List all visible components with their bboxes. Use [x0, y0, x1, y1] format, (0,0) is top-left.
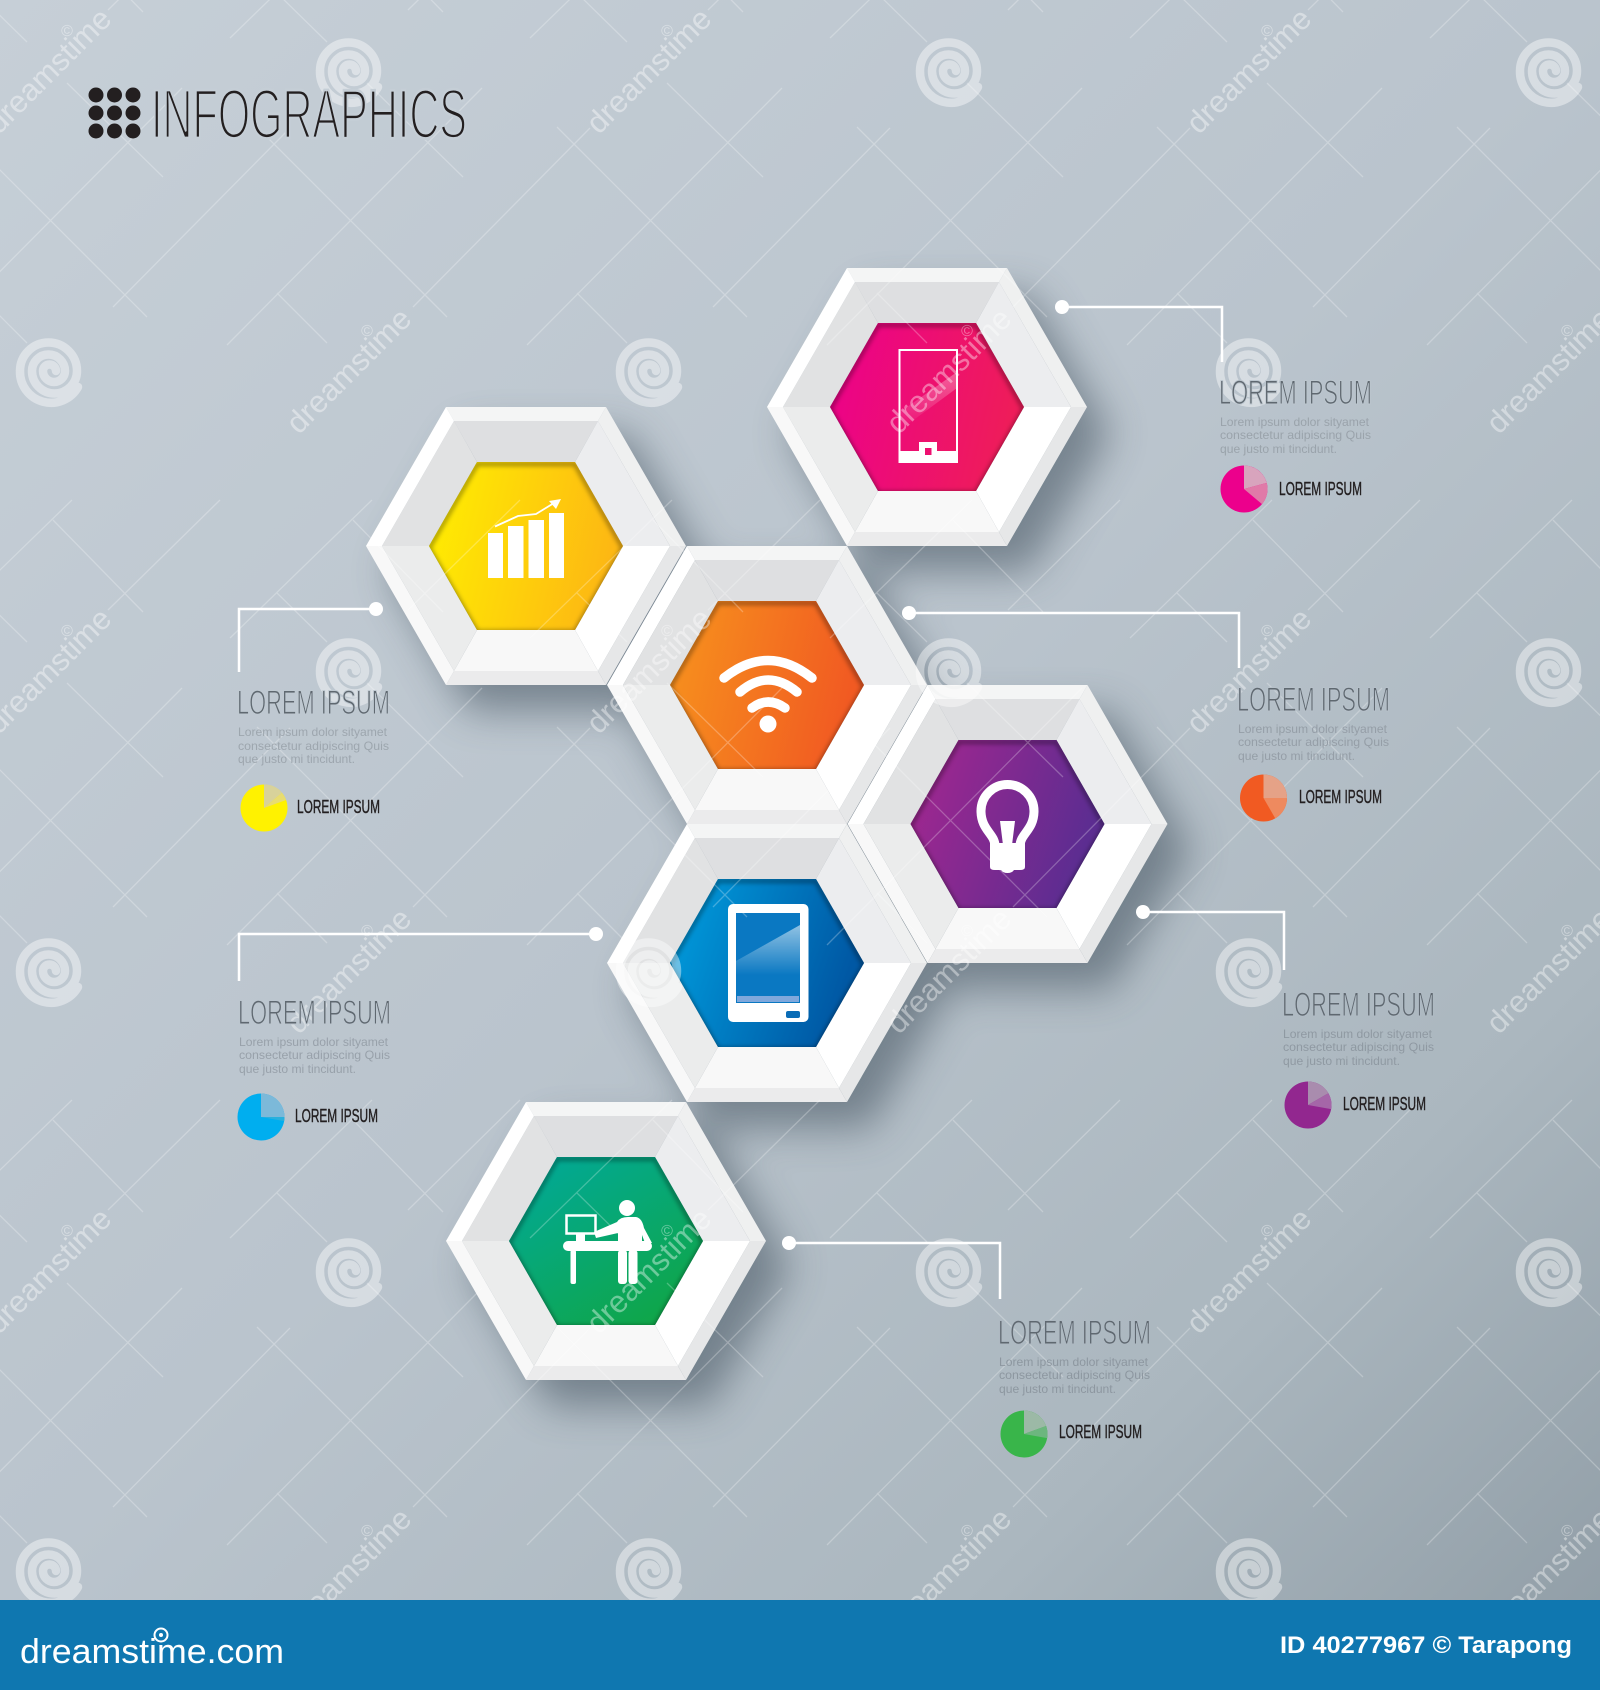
- callout: purple: [1136, 905, 1435, 1128]
- callout: yellow: LOREM IPSUM: [237, 684, 390, 722]
- watermark: dreamstime text: ©: [1561, 1523, 1573, 1540]
- hexagon: green workstation: [446, 1102, 766, 1380]
- watermark: dreamstime text: ©: [661, 23, 673, 40]
- title icon: dot grid: [88, 88, 140, 138]
- watermark: dreamstime text: ©: [361, 1523, 373, 1540]
- callout: blue: LOREM IPSUM: [238, 994, 391, 1032]
- callout: yellow: LOREM IPSUM: [297, 797, 380, 817]
- watermark: dreamstime text: ©: [1561, 323, 1573, 340]
- watermark: dreamstime text: dreamstime: [279, 301, 418, 440]
- callout: pink: que justo mi tincidunt.: [1220, 442, 1337, 456]
- footer bar: [0, 1600, 1600, 1690]
- watermark: dreamstime text: dreamstime: [579, 1, 718, 140]
- callout: purple: que justo mi tincidunt.: [1283, 1054, 1400, 1068]
- hexagon: purple bulb: [848, 685, 1168, 963]
- watermark: dreamstime text: ©: [661, 623, 673, 640]
- watermark: dreamstime text: dreamstime: [879, 901, 1018, 1040]
- callout: purple: consectetur adipiscing Quis: [1283, 1040, 1434, 1054]
- callout: blue: consectetur adipiscing Quis: [239, 1048, 390, 1062]
- callout: yellow: consectetur adipiscing Quis: [238, 739, 389, 753]
- callout: pink: [1055, 300, 1372, 512]
- watermark: dreamstime text: ©: [661, 1223, 673, 1240]
- hexagon: yellow chart: [366, 407, 686, 685]
- watermark: dreamstime text: dreamstime: [879, 1501, 1018, 1640]
- watermark: dreamstime text: ©: [1261, 623, 1273, 640]
- hexagon: blue tablet: [607, 824, 927, 1102]
- callout: pink: consectetur adipiscing Quis: [1220, 428, 1371, 442]
- callout: pink: LOREM IPSUM: [1279, 479, 1362, 499]
- hexagon: orange wifi: [607, 546, 927, 824]
- watermark: dreamstime text: ©: [1261, 23, 1273, 40]
- footer logo: dreamstime.com: [20, 1633, 284, 1671]
- callout: purple: LOREM IPSUM: [1282, 986, 1435, 1024]
- watermark: dreamstime text: dreamstime: [1179, 601, 1318, 740]
- callout: orange: LOREM IPSUM: [1299, 787, 1382, 807]
- callout: blue: LOREM IPSUM: [295, 1106, 378, 1126]
- callout: blue: que justo mi tincidunt.: [239, 1062, 356, 1076]
- watermark: dreamstime text: dreamstime: [1179, 1, 1318, 140]
- watermark: dreamstime text: ©: [61, 23, 73, 40]
- callout: yellow: [237, 602, 390, 832]
- watermark: dreamstime text: ©: [961, 1523, 973, 1540]
- watermark: dreamstime text: dreamstime: [279, 901, 418, 1040]
- watermark: dreamstime text: dreamstime: [879, 301, 1018, 440]
- hexagon drop shadows: [389, 294, 1191, 1406]
- callout: yellow: que justo mi tincidunt.: [238, 752, 355, 766]
- callout: purple: Lorem ipsum dolor sityamet: [1283, 1027, 1433, 1041]
- callout: green: que justo mi tincidunt.: [999, 1382, 1116, 1396]
- title: INFOGRAPHICS: [151, 75, 467, 153]
- hexagon: pink phone: [767, 268, 1087, 546]
- watermark: dreamstime text: ©: [61, 623, 73, 640]
- watermark: dreamstime text: ©: [361, 323, 373, 340]
- footer image id: ID 40277967 © Tarapong: [1280, 1632, 1572, 1659]
- watermark: dreamstime text: dreamstime: [279, 1501, 418, 1640]
- icon: wifi: [724, 660, 812, 732]
- watermark: dreamstime text: dreamstime: [579, 1201, 718, 1340]
- callout: pink: Lorem ipsum dolor sityamet: [1220, 415, 1370, 429]
- watermark: dreamstime text: dreamstime: [579, 601, 718, 740]
- callout: orange: Lorem ipsum dolor sityamet: [1238, 722, 1388, 736]
- watermark: dreamstime text: ©: [61, 1223, 73, 1240]
- icon: tablet: [728, 904, 808, 1022]
- callout: green: LOREM IPSUM: [1059, 1422, 1142, 1442]
- watermark: dreamstime text: dreamstime: [1179, 1201, 1318, 1340]
- callout: green: LOREM IPSUM: [998, 1314, 1151, 1352]
- icon: smartphone: [899, 350, 958, 463]
- icon: person at desk: [563, 1200, 652, 1284]
- icon: bar chart: [488, 499, 564, 578]
- callout: green: consectetur adipiscing Quis: [999, 1368, 1150, 1382]
- icon: light bulb: [981, 784, 1034, 873]
- callout: blue: [238, 927, 603, 1140]
- callout: orange: LOREM IPSUM: [1237, 681, 1390, 719]
- callout: green: [782, 1236, 1151, 1458]
- watermark: dreamstime text: ©: [361, 923, 373, 940]
- callout: orange: [902, 606, 1390, 822]
- watermark: dreamstime text: ©: [1561, 923, 1573, 940]
- callout: purple: LOREM IPSUM: [1343, 1094, 1426, 1114]
- callout: yellow: Lorem ipsum dolor sityamet: [238, 725, 388, 739]
- callout: green: Lorem ipsum dolor sityamet: [999, 1355, 1149, 1369]
- watermark: dreamstime text: ©: [1261, 1223, 1273, 1240]
- watermark: dreamstime text: ©: [961, 923, 973, 940]
- callout: blue: Lorem ipsum dolor sityamet: [239, 1035, 389, 1049]
- callout: orange: que justo mi tincidunt.: [1238, 749, 1355, 763]
- watermark: dreamstime text: ©: [961, 323, 973, 340]
- callout: pink: LOREM IPSUM: [1219, 374, 1372, 412]
- callout: orange: consectetur adipiscing Quis: [1238, 735, 1389, 749]
